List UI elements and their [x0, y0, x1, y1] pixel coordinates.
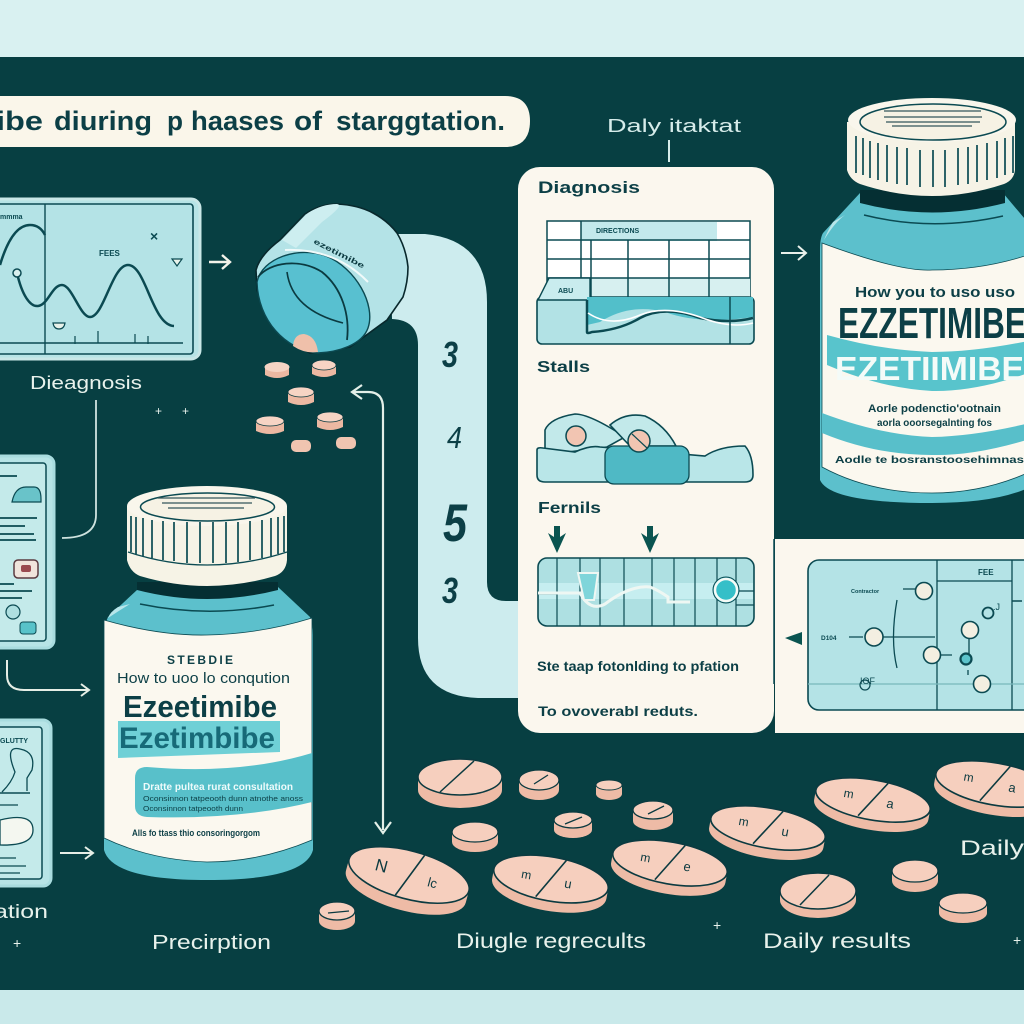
label: precription: Precirption	[152, 932, 271, 954]
illustration: stalls	[537, 414, 753, 484]
connector: diagnosis to card	[62, 400, 96, 538]
step numbers: 4	[447, 420, 462, 455]
bottle label: How you to uso uso	[855, 284, 1015, 301]
pill P	[319, 902, 355, 930]
panel: right diagram background	[774, 539, 1024, 733]
bottle label: Aorle podenctio'ootnain	[868, 403, 1001, 415]
arrow: panel to bottle	[781, 246, 806, 260]
pill G: lc	[426, 874, 439, 891]
arrow: chart to cap	[209, 255, 230, 269]
bottle cap	[847, 98, 1016, 196]
heading: fernils: Fernils	[538, 500, 601, 517]
pill I: m	[639, 850, 652, 865]
arrow: patient card to bottle	[60, 847, 93, 859]
arrow: diagram to panel	[785, 632, 802, 645]
bottle label: Alls fo ttass thio consoringorgom	[132, 828, 260, 839]
heading: stalls: Stalls	[537, 359, 590, 376]
text: results caption: To ovoverabl reduts.	[538, 703, 698, 719]
pill H: u	[563, 876, 573, 892]
icon: tipped bottle cap: ezetimibe	[312, 237, 366, 270]
sparkle right: +	[1013, 932, 1021, 948]
pill B	[519, 770, 559, 800]
bottle label: Aodle te bosranstoosehimnas	[835, 455, 1024, 466]
panel: line chart: mmma	[0, 214, 23, 221]
label: daily results: Daily results	[763, 930, 911, 953]
panel: patient card	[0, 720, 51, 886]
pill H: m	[520, 867, 533, 882]
panel: line chart: ×	[150, 228, 158, 244]
panel: steps	[518, 167, 774, 733]
top band	[0, 0, 1024, 57]
bottom band	[0, 990, 1024, 1024]
step numbers	[442, 334, 468, 611]
pill J: u	[780, 824, 790, 840]
pill K: m	[843, 786, 855, 801]
pill C	[596, 780, 622, 800]
bottle neck	[137, 582, 278, 599]
chart: timeline strip	[538, 526, 754, 626]
icon: tipped bottle cap	[256, 204, 408, 353]
pill L: m	[963, 770, 975, 785]
bottle label: How to uoo lo conqution	[117, 670, 290, 687]
pill H	[488, 847, 612, 921]
bottle label: Oconsinnon tatpeooth dunn atnothe anoss	[143, 794, 303, 803]
sparkle: +	[13, 935, 21, 951]
bottle label	[104, 618, 312, 862]
bottle label: Ezeetimibe	[123, 689, 277, 724]
step numbers: 3	[442, 570, 458, 611]
chart: table and wave	[537, 221, 754, 344]
sparkles: + +	[155, 404, 189, 418]
title banner: starggtation.	[336, 106, 505, 136]
pill L	[931, 753, 1024, 825]
icon: falling pills	[256, 360, 356, 452]
pill G: N	[373, 855, 390, 877]
title banner: haases	[191, 106, 284, 136]
bottle neck	[860, 190, 1005, 212]
pill M	[780, 873, 856, 918]
pill I: e	[682, 859, 692, 875]
title banner: of	[294, 106, 323, 136]
chart: node diagram	[808, 560, 1024, 710]
title banner: diuring	[54, 106, 152, 136]
heading: daily intake	[607, 116, 741, 162]
panel: patient card: GLUTTY	[0, 738, 28, 745]
pill J: m	[738, 814, 750, 829]
icon: large bottle left	[104, 486, 313, 880]
pill I	[607, 832, 731, 904]
pill N	[892, 860, 938, 892]
bottle label: Dratte pultea rurat consultation	[143, 782, 293, 793]
connector: ribbon to panel	[390, 234, 520, 698]
bottle label: Ezetimbibe	[119, 722, 275, 755]
sparkles bottom: +	[713, 917, 721, 933]
pill A	[418, 759, 502, 808]
text: stepup caption: Ste taap fotonlding to pfation	[537, 659, 739, 674]
chart: node diagram: D104	[821, 635, 837, 642]
step numbers: 3	[442, 334, 458, 375]
panel: line chart	[0, 199, 200, 359]
bottle label: aorla ooorsegalnting fos	[877, 418, 992, 429]
title banner: p	[167, 106, 183, 136]
heading: daily intake: Daly itaktat	[607, 116, 741, 136]
pill G	[340, 836, 475, 926]
pills row	[319, 753, 1024, 930]
panel: line chart: FEES	[99, 249, 121, 258]
icon: large bottle right	[820, 98, 1024, 503]
pill K: a	[885, 796, 896, 812]
label: diugle regrecults: Diugle regrecults	[456, 930, 646, 953]
heading: diagnosis: Diagnosis	[538, 178, 640, 197]
pill O	[939, 893, 987, 923]
chart: node diagram: IOF	[860, 676, 876, 686]
bottle label: Oconsinnon tatpeooth dunn	[143, 804, 243, 813]
bottle cap	[127, 486, 287, 586]
label: daily: Daily	[960, 837, 1024, 860]
chart: node diagram: FEE	[978, 568, 994, 577]
chart: node diagram: .J	[993, 602, 1000, 612]
bottle label: STEBDIE	[167, 653, 233, 667]
title banner	[0, 96, 530, 147]
bottle label: EZETIIMIBE	[835, 350, 1024, 387]
pill E	[452, 822, 498, 852]
chart: table and wave: ABU	[558, 288, 573, 295]
panel: info card	[0, 456, 54, 648]
arrow: card to bottle	[7, 660, 89, 696]
pill F	[554, 812, 592, 838]
pill J	[706, 798, 829, 868]
step numbers: 5	[443, 494, 468, 553]
pill L: a	[1007, 780, 1018, 796]
connector: double-headed arrow	[352, 385, 391, 833]
chart: node diagram: Contractor	[851, 589, 880, 595]
pill D	[633, 801, 673, 830]
pill K	[811, 770, 934, 840]
chart: table and wave: DIRECTIONS	[596, 228, 640, 235]
label: diagnosis: Dieagnosis	[30, 373, 142, 393]
bottle label	[822, 243, 1024, 493]
